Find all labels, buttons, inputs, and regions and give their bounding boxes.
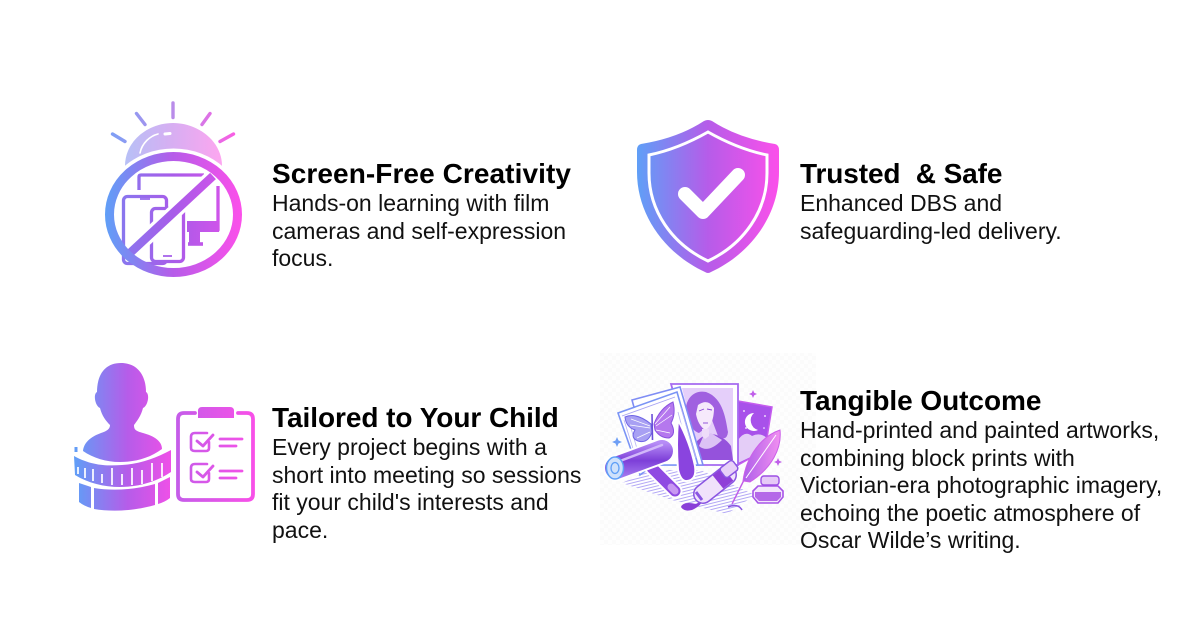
description: Oscar Wilde’s writing. [800, 527, 1021, 553]
panel: trusted and safe [637, 120, 1062, 273]
description [272, 434, 581, 543]
panel: tailored to your child [74, 363, 581, 543]
heading: Tailored to Your Child [272, 402, 559, 433]
description: echoing the poetic atmosphere of [800, 500, 1140, 526]
description [272, 190, 566, 271]
heading: Trusted & Safe [800, 158, 1002, 189]
icon: child with measuring tape and checklist [74, 363, 255, 511]
description: Hand-printed and painted artworks, [800, 417, 1159, 443]
description: Every project begins with a [272, 434, 547, 460]
description: short into meeting so sessions [272, 462, 581, 488]
butterfly [625, 402, 674, 442]
description: Victorian-era photographic imagery, [800, 472, 1162, 498]
panel: tangible outcome [605, 383, 1162, 553]
description: safeguarding-led delivery. [800, 218, 1062, 244]
description: focus. [272, 245, 333, 271]
panel: screen-free creativity [105, 101, 571, 277]
description: Hands-on learning with film [272, 190, 549, 216]
description: Enhanced DBS and [800, 190, 1002, 216]
icon: no screens under a rising sun [105, 101, 242, 277]
icon: shield with check mark [637, 120, 779, 273]
description [800, 417, 1162, 553]
heading: Tangible Outcome [800, 385, 1041, 416]
description: combining block prints with [800, 444, 1075, 470]
description [800, 190, 1062, 244]
heading: Screen-Free Creativity [272, 158, 571, 189]
illustration: prints, portrait, roller, paint tube, quill and ink [605, 383, 784, 514]
description: fit your child's interests and [272, 489, 549, 515]
description: cameras and self-expression [272, 218, 566, 244]
description: pace. [272, 516, 328, 542]
